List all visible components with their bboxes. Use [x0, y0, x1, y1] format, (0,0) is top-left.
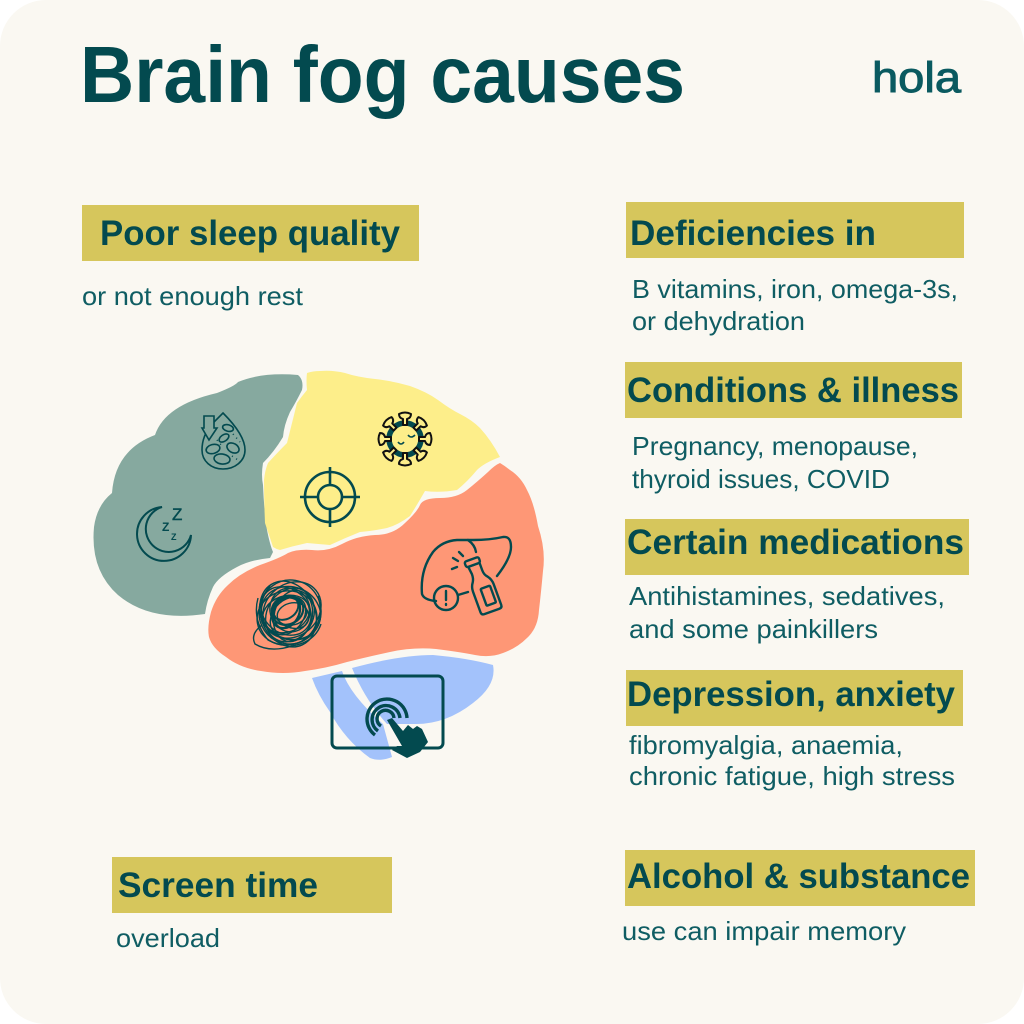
panel: alcohol and substance: Alcohol & substance: [627, 857, 970, 896]
panel: deficiencies: B vitamins, iron, omega-3s,: [632, 274, 958, 304]
panel: poor sleep quality: Poor sleep quality: [100, 214, 401, 253]
panel: depression and anxiety: fibromyalgia, anaemia,: [629, 730, 903, 760]
icon: moon with z letters: Z: [162, 520, 169, 534]
panel: depression and anxiety: chronic fatigue, high stress: [629, 761, 955, 791]
brain lobe: yellow: [264, 371, 500, 550]
icon: liver with bottle: [422, 537, 511, 615]
icon: target crosshair: [300, 467, 360, 527]
title: Brain fog causes: [80, 30, 685, 119]
icon: moon with z letters: Z: [171, 532, 177, 542]
panel: deficiencies: Deficiencies in: [630, 214, 876, 253]
brain lobe: blue: [312, 655, 494, 760]
panel: depression and anxiety: [626, 670, 963, 791]
panel: alcohol and substance: [622, 850, 975, 946]
icon: moon with z letters: Z: [172, 505, 182, 524]
panel: conditions and illness: Pregnancy, menopause,: [632, 431, 918, 461]
panel: deficiencies: or dehydration: [632, 306, 805, 336]
panel: deficiencies: [626, 202, 964, 336]
panel: screen time: overload: [116, 923, 220, 953]
panel: screen time: Screen time: [118, 866, 318, 905]
panel: certain medications: Antihistamines, sedatives,: [629, 581, 945, 611]
panel: poor sleep quality: [82, 205, 419, 311]
brain lobe: orange: [208, 463, 544, 673]
brain illustration: [94, 371, 544, 760]
panel: alcohol and substance: use can impair memory: [622, 916, 906, 946]
panel: poor sleep quality: or not enough rest: [82, 281, 304, 311]
panel: conditions and illness: Conditions & illness: [627, 371, 959, 410]
panel: conditions and illness: [625, 362, 962, 494]
panel: screen time: [112, 857, 392, 953]
panel: conditions and illness: thyroid issues, COVID: [632, 464, 890, 494]
icon: tangled scribble: [249, 570, 332, 656]
brain lobe: green: [94, 374, 302, 616]
panel: certain medications: and some painkillers: [629, 614, 878, 644]
icon: touch screen with tapping hand: [332, 676, 443, 758]
icon: moon with z letters: [137, 505, 191, 561]
icon: smiling virus: [378, 412, 432, 466]
panel: certain medications: [625, 519, 969, 644]
panel: depression and anxiety: Depression, anxiety: [627, 675, 956, 714]
logo: hola: hola: [872, 54, 961, 102]
icon: blood drop with down arrow: [202, 413, 245, 469]
panel: certain medications: Certain medications: [627, 523, 964, 562]
